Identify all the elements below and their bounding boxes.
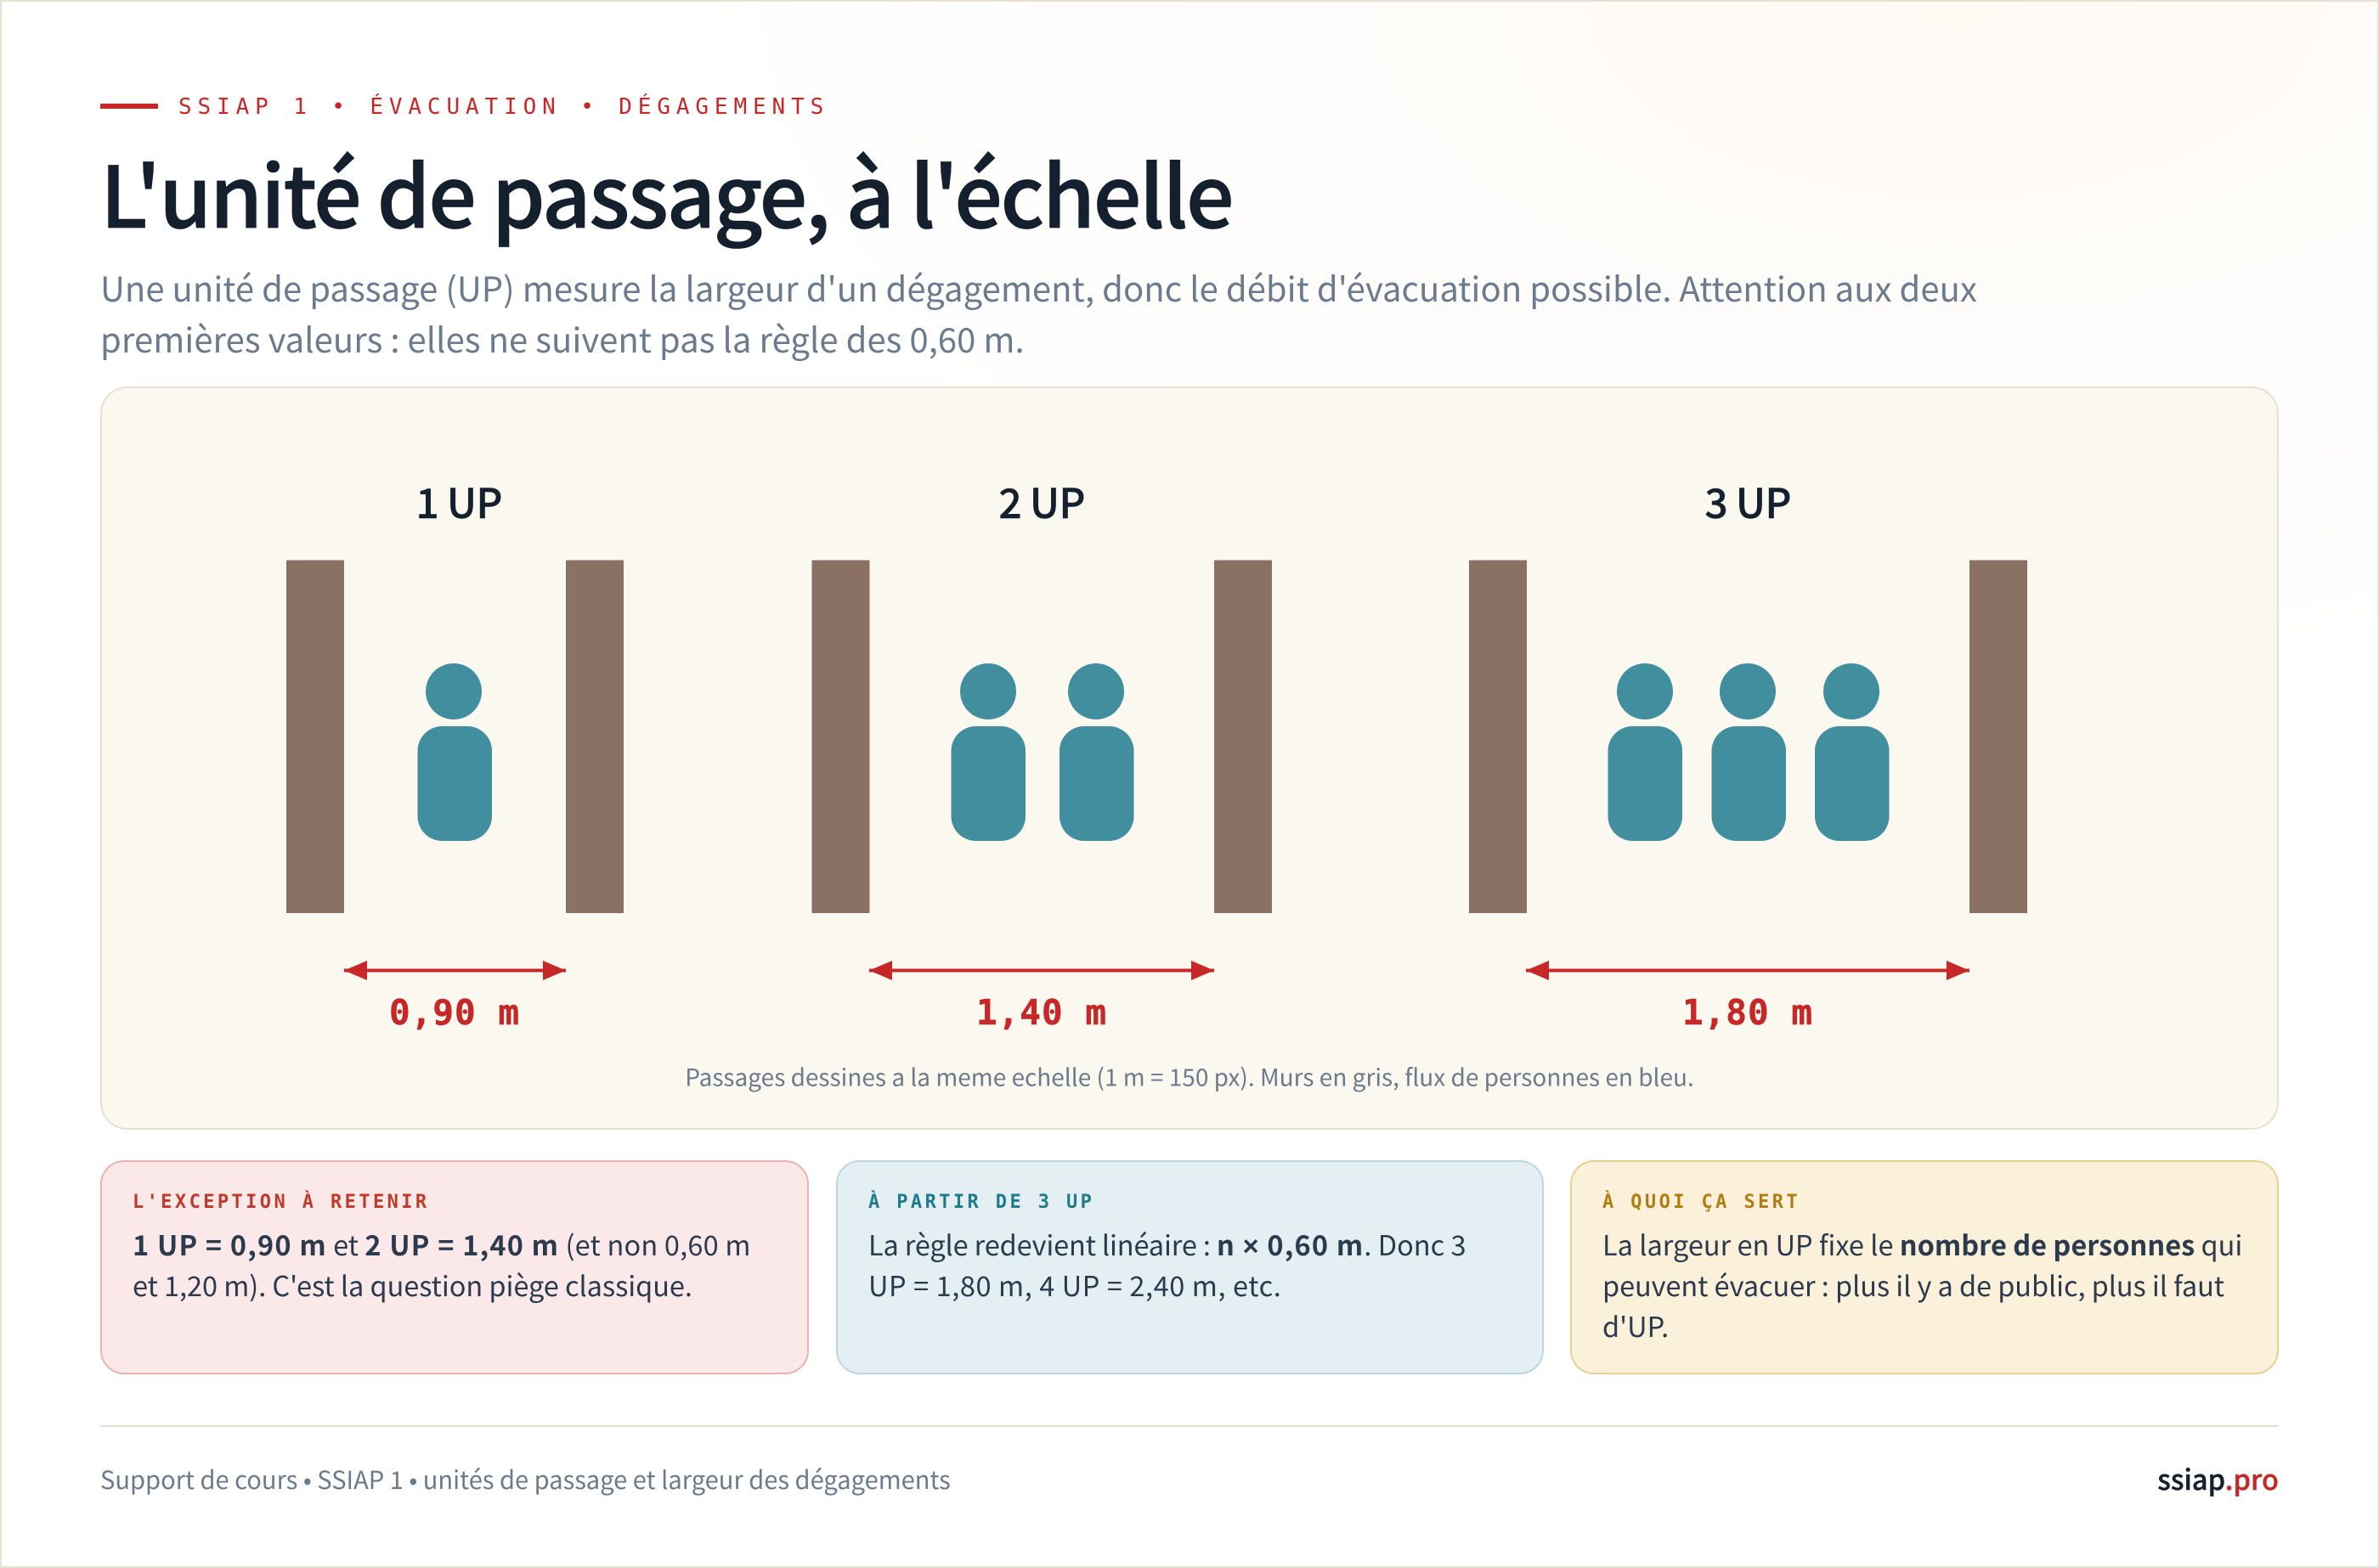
wall left xyxy=(812,561,870,913)
width 1,40 m: 1,40 m xyxy=(976,992,1107,1033)
card text: UP = 1,80 m, 4 UP = 2,40 m, etc. xyxy=(868,1265,1281,1305)
wall right xyxy=(1214,561,1272,913)
arrow xyxy=(869,961,1214,980)
subtitle: Une unité de passage (UP) mesure la largeur d'un dégagement, donc le débit d'évacuation possible. Attention aux deux xyxy=(100,262,1977,312)
width 1,80 m: 1,80 m xyxy=(1682,992,1813,1033)
card text xyxy=(1602,1224,2242,1345)
card: from 3 UP xyxy=(836,1160,1544,1374)
group: 2 UP xyxy=(812,471,1272,1033)
brand: ssiap.pro xyxy=(2157,1458,2279,1498)
card label: L'EXCEPTION À RETENIR xyxy=(133,1192,430,1213)
group: 3 UP xyxy=(1469,471,2027,1033)
wall left xyxy=(286,561,344,913)
card: exception xyxy=(100,1160,809,1374)
subtitle xyxy=(100,262,1977,363)
card text xyxy=(133,1224,751,1305)
card text: 1 UP = 0,90 m et 2 UP = 1,40 m (et non 0,60 m xyxy=(133,1224,751,1264)
label 3 UP: 3 UP xyxy=(1704,471,1791,530)
arrow xyxy=(344,961,566,980)
card label: À PARTIR DE 3 UP xyxy=(868,1192,1094,1213)
card: purpose xyxy=(1570,1160,2279,1374)
card label: À QUOI ÇA SERT xyxy=(1602,1192,1800,1213)
subtitle: premières valeurs : elles ne suivent pas la règle des 0,60 m. xyxy=(100,313,1025,363)
footer note: Support de cours • SSIAP 1 • unités de passage et largeur des dégagements xyxy=(100,1461,951,1497)
card text: peuvent évacuer : plus il y a de public, plus il faut xyxy=(1602,1265,2224,1305)
card text: et 1,20 m). C'est la question piège classique. xyxy=(133,1265,692,1305)
footer rule xyxy=(100,1425,2279,1427)
eyebrow: SSIAP 1 • ÉVACUATION • DÉGAGEMENTS xyxy=(178,94,829,120)
title: L'unité de passage, à l'échelle xyxy=(100,129,1232,252)
card text xyxy=(868,1224,1466,1305)
wall right xyxy=(566,561,624,913)
panel: scale diagram xyxy=(100,386,2279,1130)
card text: La règle redevient linéaire : n × 0,60 m. Donc 3 xyxy=(868,1224,1466,1264)
caption: Passages dessines a la meme echelle (1 m = 150 px). Murs en gris, flux de personnes en bleu. xyxy=(685,1060,1694,1094)
wall left xyxy=(1469,561,1527,913)
width 0,90 m: 0,90 m xyxy=(389,992,520,1033)
persons xyxy=(952,663,1133,841)
wall right xyxy=(1969,561,2027,913)
group: 1 UP xyxy=(286,471,624,1033)
card text: d'UP. xyxy=(1602,1306,1669,1345)
label 1 UP: 1 UP xyxy=(415,471,502,530)
person xyxy=(418,663,492,841)
card text: La largeur en UP fixe le nombre de personnes qui xyxy=(1602,1224,2242,1264)
persons xyxy=(1608,663,1890,841)
arrow xyxy=(1526,961,1969,980)
label 2 UP: 2 UP xyxy=(998,471,1085,530)
